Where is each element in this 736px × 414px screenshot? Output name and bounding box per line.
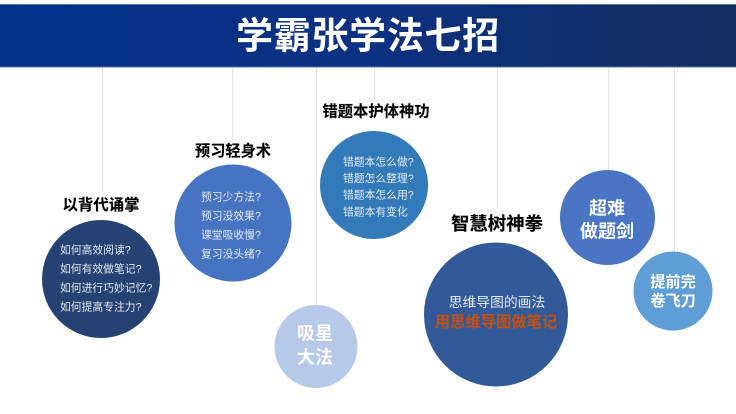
circle: steel blue xyxy=(320,131,428,239)
title: 学霸张学法七招 xyxy=(236,16,500,56)
panel: 错题本护体神功 xyxy=(320,104,430,239)
circle: 提前完卷飞刀: 提前完 xyxy=(650,273,696,291)
circle: mid blue xyxy=(174,164,292,282)
circle: 吸星大法: 吸星 xyxy=(297,324,333,344)
list: mistake notebook questions: 错题本怎么用? xyxy=(343,188,414,202)
circle: dark navy xyxy=(42,220,160,338)
list: mistake notebook questions xyxy=(343,154,414,218)
list: reading questions: 如何提高专注力? xyxy=(60,300,142,314)
list: reading questions xyxy=(60,242,152,314)
list: reading questions: 如何有效做笔记? xyxy=(60,262,142,276)
list: mistake notebook questions: 错题本有变化 xyxy=(343,204,408,218)
circle: 提前完卷飞刀: 卷飞刀 xyxy=(650,292,696,310)
text: mind map method: 思维导图的画法 xyxy=(449,295,545,310)
heading: 以背代诵掌: 以背代诵掌 xyxy=(63,195,139,214)
circle: 提前完卷飞刀 xyxy=(634,252,712,330)
circle: 吸星大法 xyxy=(274,305,358,388)
panel: 以背代诵掌 xyxy=(42,195,160,338)
list: preview questions: 课堂吸收慢? xyxy=(201,228,261,242)
list: reading questions: 如何进行巧妙记忆? xyxy=(60,280,152,294)
list: reading questions: 如何高效阅读? xyxy=(60,242,131,256)
circle: 吸星大法: 大法 xyxy=(297,348,333,368)
circle: 超难做题剑: 做题剑 xyxy=(580,220,634,242)
title banner xyxy=(0,4,736,67)
list: mistake notebook questions: 错题怎么整理? xyxy=(343,171,414,185)
list: mistake notebook questions: 错题本怎么做? xyxy=(343,154,414,168)
text: mind map notes highlight: 用思维导图做笔记 xyxy=(435,313,557,331)
panel: 智慧树神拳 xyxy=(424,213,568,386)
list: preview questions: 复习没头绪? xyxy=(201,246,261,260)
circle: 超难做题剑: 超难 xyxy=(589,198,625,218)
heading: 错题本护体神功: 错题本护体神功 xyxy=(322,104,430,120)
panel: 预习轻身术 xyxy=(174,142,292,282)
circle: large blue xyxy=(424,242,568,386)
heading: 智慧树神拳: 智慧树神拳 xyxy=(451,213,544,234)
list: preview questions xyxy=(201,190,261,260)
list: preview questions: 预习少方法? xyxy=(201,190,261,204)
circle: 超难做题剑 xyxy=(560,170,655,265)
heading: 预习轻身术: 预习轻身术 xyxy=(195,142,271,160)
list: preview questions: 预习没效果? xyxy=(201,208,261,222)
